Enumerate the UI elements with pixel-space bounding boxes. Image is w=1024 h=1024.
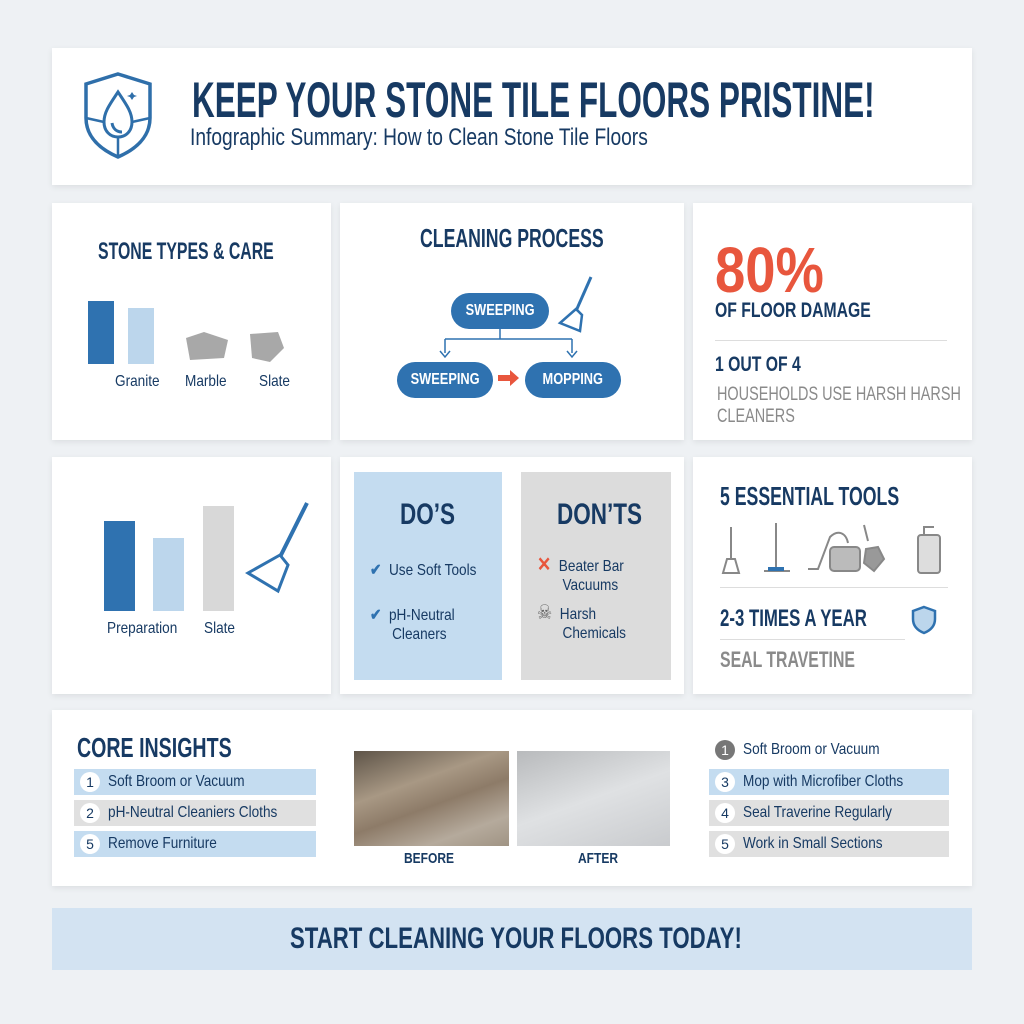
panel: stone types: Slate xyxy=(259,373,290,390)
left list: 1 xyxy=(86,774,94,790)
right list: Soft Broom or Vacuum xyxy=(743,741,880,758)
panel: tools: SEAL TRAVETINE xyxy=(720,647,855,672)
panel: core insights: CORE INSIGHTS xyxy=(77,732,232,763)
panel: cleaning process: SWEEPING xyxy=(465,302,534,319)
icons: tools xyxy=(722,523,941,574)
panel: bar chart 2 xyxy=(52,457,331,694)
after image xyxy=(517,751,670,846)
left list xyxy=(74,769,316,795)
panel: core insights: 2 xyxy=(86,805,94,821)
panel: statistics: HOUSEHOLDS USE HARSH HARSH xyxy=(717,384,961,405)
panel: core insights: Work in Small Sections xyxy=(743,835,883,852)
panel: core insights: BEFORE xyxy=(404,850,454,867)
dos: ✔ pH-Neutral xyxy=(370,607,455,624)
panel: core insights: AFTER xyxy=(578,850,618,867)
donts: Vacuums xyxy=(562,577,618,594)
dos xyxy=(354,472,502,680)
second stat: 1 OUT OF 4 xyxy=(715,353,801,376)
panel: statistics: CLEANERS xyxy=(717,406,795,427)
panel: dos and donts xyxy=(340,457,684,694)
donts: Chemicals xyxy=(562,625,626,642)
footer banner xyxy=(52,908,972,970)
panel: tools: 2-3 TIMES A YEAR xyxy=(720,605,867,632)
labels: Granite xyxy=(115,373,160,390)
panel: core insights: 5 xyxy=(721,836,729,852)
donts: ✕ Beater Bar xyxy=(537,554,624,576)
donts xyxy=(521,472,671,680)
subtitle: Infographic Summary: How to Clean Stone Tile Floors xyxy=(190,124,648,151)
big stat: 80% xyxy=(715,234,824,306)
panel: core insights: 5 xyxy=(86,836,94,852)
panel: bar chart 2: Slate xyxy=(204,620,235,637)
header card xyxy=(52,48,972,185)
panel: statistics: OF FLOOR DAMAGE xyxy=(715,299,871,322)
panel: core insights: Remove Furniture xyxy=(108,835,217,852)
icon: shield xyxy=(912,606,936,634)
heading: CLEANING PROCESS xyxy=(420,223,604,253)
title: KEEP YOUR STONE TILE FLOORS PRISTINE! xyxy=(192,72,875,128)
panel: core insights: Seal Traverine Regularly xyxy=(743,804,892,821)
bar chart xyxy=(88,301,284,364)
before image xyxy=(354,751,509,846)
heading: STONE TYPES & CARE xyxy=(98,238,274,265)
dos: Cleaners xyxy=(392,626,447,643)
chart xyxy=(104,502,309,611)
panel: core insights: Mop with Microfiber Cloths xyxy=(743,773,903,790)
icon: shield with drop xyxy=(84,72,152,159)
left list: Soft Broom or Vacuum xyxy=(108,773,245,790)
panel: core insights: 3 xyxy=(721,774,729,790)
donts: ☠ Harsh xyxy=(537,602,596,624)
dos: ✔ Use Soft Tools xyxy=(370,562,476,579)
panel: stone types xyxy=(52,203,331,440)
panel: core insights: pH-Neutral Cleaniers Cloths xyxy=(108,804,277,821)
right list: 1 xyxy=(721,742,729,758)
panel: cleaning process: SWEEPING xyxy=(410,371,479,388)
footer banner: START CLEANING YOUR FLOORS TODAY! xyxy=(290,922,742,955)
flow diagram xyxy=(440,276,592,386)
dos: DO’S xyxy=(400,498,455,531)
panel: cleaning process: MOPPING xyxy=(543,371,603,388)
panel: core insights xyxy=(52,710,972,886)
donts: DON’TS xyxy=(557,498,642,531)
panel: stone types: Marble xyxy=(185,373,227,390)
panel: core insights: 4 xyxy=(721,805,729,821)
panel: statistics xyxy=(693,203,972,440)
panel: tools: 5 ESSENTIAL TOOLS xyxy=(720,481,899,511)
panel: bar chart 2: Preparation xyxy=(107,620,177,637)
panel: cleaning process xyxy=(340,203,684,440)
panel: tools xyxy=(693,457,972,694)
